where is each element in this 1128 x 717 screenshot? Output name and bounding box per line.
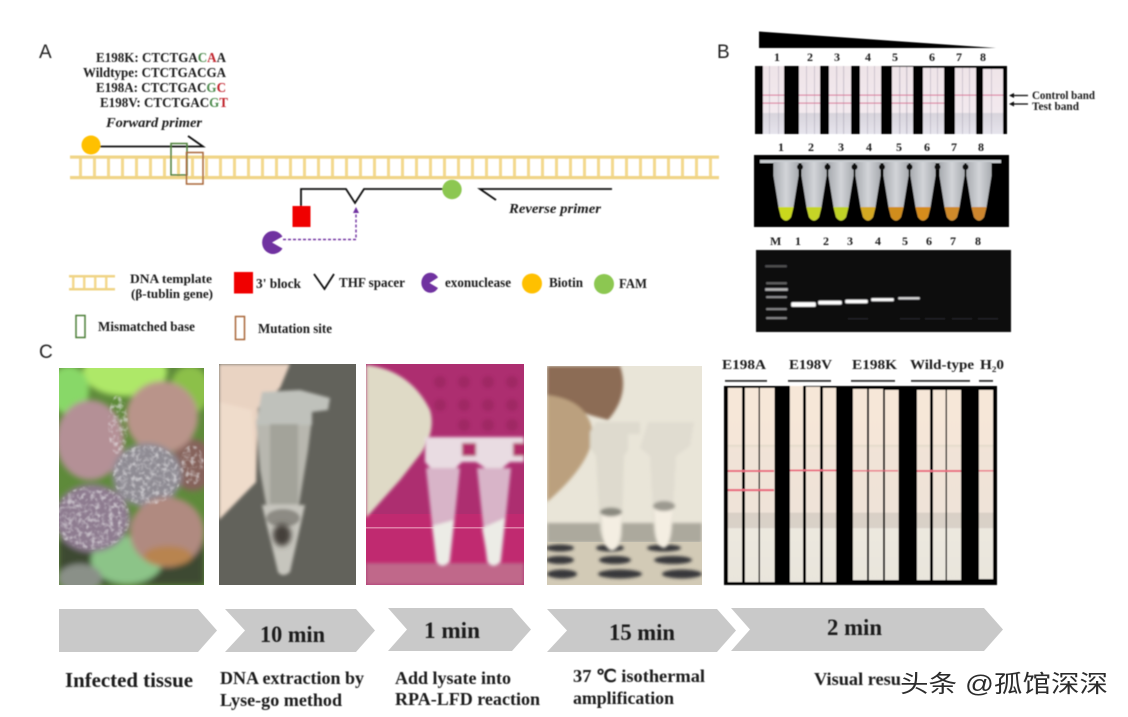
panel B: sensitivity results [717, 32, 1096, 332]
lateral flow strips [755, 66, 1007, 134]
sequence alignment [83, 50, 228, 110]
gel lane labels: 3 [847, 234, 853, 248]
lane numbers for strips: 6 [929, 50, 935, 64]
lane numbers for strips: 2 [807, 50, 813, 64]
photo: tube after DNA extraction [219, 364, 356, 585]
DNA template ladder [70, 156, 719, 179]
3' block on probe [292, 206, 310, 227]
panel C: field workflow [39, 342, 1004, 710]
legend: DNA template [69, 271, 213, 301]
legend: Biotin [522, 274, 583, 294]
lane numbers for tubes: 7 [951, 140, 957, 154]
legend: FAM: FAM [619, 276, 647, 291]
reverse primer label: Reverse primer [508, 202, 602, 217]
forward primer label: Forward primer [105, 116, 203, 131]
lane numbers for tubes [778, 140, 984, 154]
reaction tubes colour result [754, 155, 1009, 227]
step durations: 1 min [424, 618, 480, 643]
step captions: RPA-LFD reaction [395, 689, 540, 709]
legend: THF spacer [314, 274, 405, 290]
lane numbers for tubes: 1 [778, 140, 784, 154]
watermark: 头条 @孤馆深深 [900, 671, 1108, 698]
concentration gradient wedge [759, 32, 996, 48]
legend: 3' block: 3' block [256, 276, 301, 291]
legend: exonuclease: exonuclease [445, 275, 511, 290]
gel lane labels: 8 [975, 234, 981, 248]
step durations: 15 min [609, 620, 675, 645]
arrow: 1 min [388, 608, 531, 651]
legend [69, 271, 647, 340]
legend: mismatched base: Mismatched base [98, 319, 195, 334]
gel lane labels: 1 [795, 234, 801, 248]
gel lane labels: 7 [950, 234, 956, 248]
legend: DNA template: (β-tublin gene) [131, 286, 213, 301]
step captions [65, 666, 901, 710]
lane numbers for strips: 5 [892, 50, 898, 64]
lane numbers for strips: 3 [834, 50, 840, 64]
band arrows [1009, 93, 1028, 106]
mismatched base box [171, 144, 187, 175]
sequence alignment: E198A: CTCTGACGC [96, 80, 226, 95]
strip group labels: E198A [722, 358, 767, 373]
test band label: Test band [1032, 101, 1080, 113]
forward primer with biotin [82, 136, 203, 154]
photo: add lysate to reaction [366, 364, 527, 585]
panel A: RPA-LFD primer and probe schematic [39, 42, 719, 340]
sequence alignment: E198K: CTCTGACAA [96, 50, 226, 65]
exonuclease cleavage path [262, 207, 359, 254]
photo: infected grape tissue [59, 368, 204, 585]
strip group labels [722, 358, 1004, 382]
lane numbers for strips [774, 50, 986, 64]
step durations: 10 min [260, 622, 325, 647]
legend: Biotin: Biotin [549, 275, 583, 290]
legend: mutation site [236, 316, 332, 340]
lane numbers for tubes: 5 [896, 140, 902, 154]
step captions: amplification [573, 688, 674, 708]
lane numbers for tubes: 3 [838, 140, 844, 154]
gel lane labels: 6 [926, 234, 932, 248]
legend: mutation site: Mutation site [258, 321, 332, 336]
arrow: infected tissue [59, 609, 217, 652]
arrow: 10 min [225, 609, 375, 652]
step captions: Infected tissue [65, 668, 193, 692]
gel lane labels: 5 [902, 234, 908, 248]
arrow: 15 min [547, 609, 736, 652]
control band label: Control band [1032, 90, 1096, 102]
step durations [260, 615, 882, 647]
legend: FAM [594, 274, 647, 294]
photo: isothermal amplification [546, 366, 702, 585]
lane numbers for tubes: 2 [808, 140, 814, 154]
step captions: Add lysate into [395, 668, 511, 688]
legend: 3' block [234, 272, 301, 294]
sequence alignment: E198V: CTCTGACGT [100, 95, 228, 110]
panel letter B: B [717, 42, 730, 63]
gel lane labels: 2 [823, 234, 829, 248]
workflow arrows [59, 608, 1003, 652]
lane numbers for strips: 7 [956, 50, 962, 64]
strip group labels: H₂0 [980, 358, 1004, 373]
agarose gel image [756, 250, 1011, 332]
gel lane labels [770, 234, 981, 248]
arrow: 2 min [731, 608, 1003, 651]
legend: mismatched base [76, 316, 195, 338]
legend: DNA template: DNA template [130, 271, 212, 286]
gel lane labels: 4 [875, 234, 881, 248]
FAM marker [442, 180, 462, 199]
strip group labels: Wild-type [910, 358, 974, 373]
step captions: Visual resu [814, 669, 901, 689]
lane numbers for strips: 1 [774, 50, 780, 64]
panel letter A: A [39, 42, 52, 63]
sequence alignment: Wildtype: CTCTGACGA [83, 65, 226, 80]
lane numbers for tubes: 4 [866, 140, 872, 154]
step captions: Lyse-go method [220, 690, 342, 710]
mutation site box [186, 152, 203, 184]
lane numbers for strips: 8 [980, 50, 986, 64]
lane numbers for tubes: 8 [978, 140, 984, 154]
probe with THF spacer [301, 189, 444, 206]
step captions: 37 ℃ isothermal [573, 666, 705, 686]
step captions: DNA extraction by [220, 668, 364, 688]
gel lane labels: M [770, 234, 781, 248]
strip group labels: E198V [789, 358, 832, 373]
reverse primer [480, 189, 612, 200]
lateral flow strips by genotype [724, 386, 997, 585]
strip group labels: E198K [852, 358, 897, 373]
legend: exonuclease [421, 273, 511, 293]
step durations: 2 min [827, 615, 882, 640]
panel letter C: C [39, 342, 53, 363]
legend: THF spacer: THF spacer [339, 275, 405, 290]
lane numbers for strips: 4 [865, 50, 871, 64]
lane numbers for tubes: 6 [924, 140, 930, 154]
